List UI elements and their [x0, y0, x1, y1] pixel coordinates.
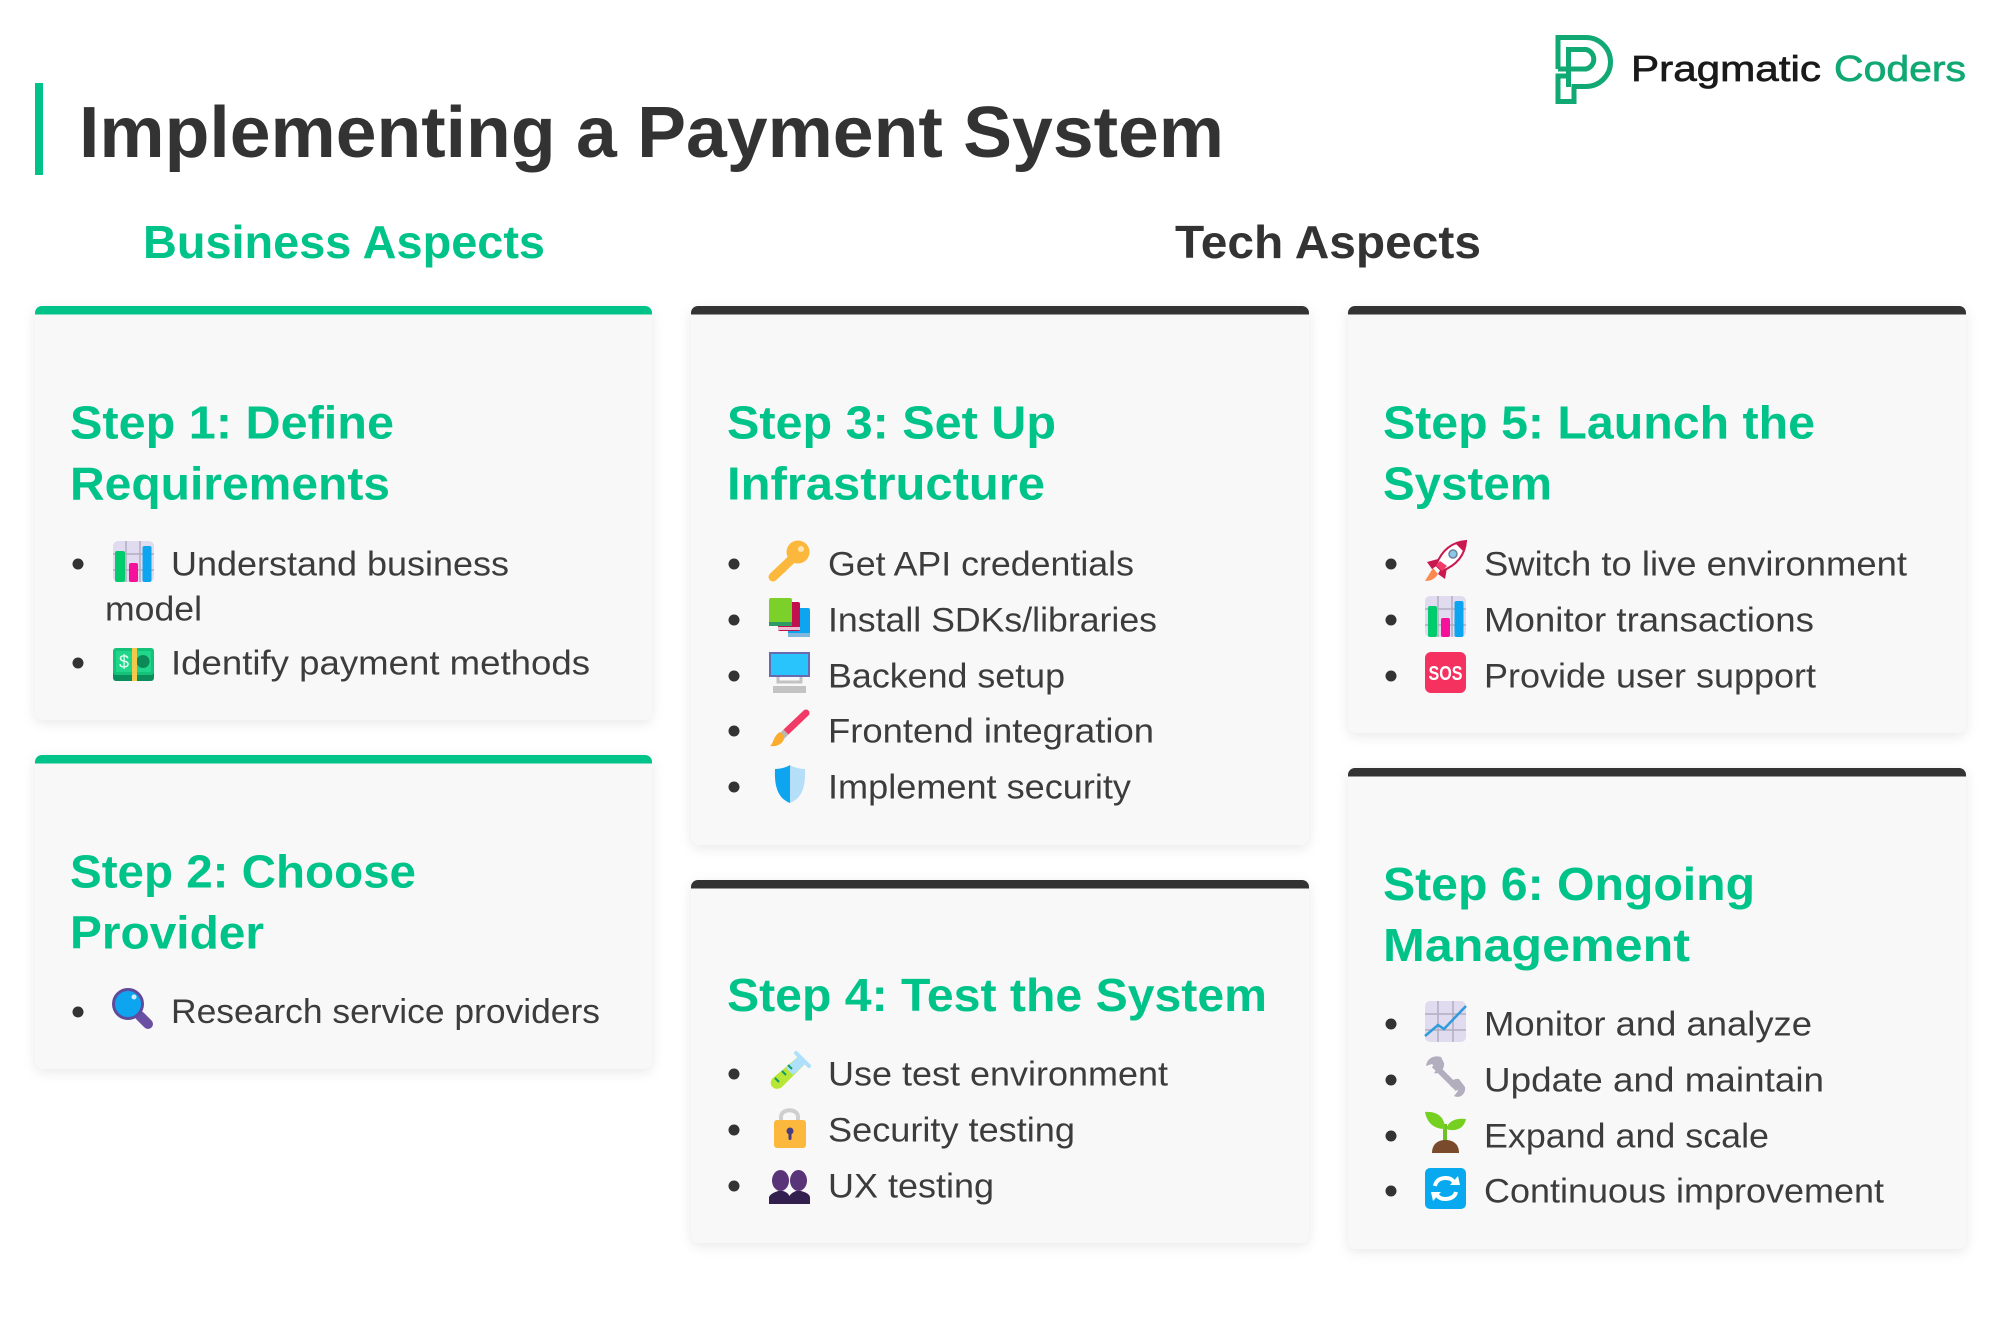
panel: step 3	[691, 306, 1309, 845]
step 6 heading: Management	[1383, 919, 1690, 971]
text: Identify payment methods	[171, 644, 590, 682]
logo wordmark accent: Coders	[1834, 48, 1966, 89]
heading: Tech Aspects: Tech Aspects	[1175, 216, 1481, 268]
item: implement security	[728, 765, 1131, 806]
icon: computer	[770, 653, 809, 693]
text: Monitor transactions	[1484, 602, 1814, 640]
item: install SDKs/libraries	[728, 598, 1157, 640]
text: Implement security	[828, 768, 1131, 806]
text: Continuous improvement	[1484, 1172, 1885, 1210]
text: Install SDKs/libraries	[828, 602, 1157, 640]
step 3 heading: Infrastructure	[727, 458, 1045, 510]
step 5 heading: Step 5: Launch the	[1383, 396, 1815, 448]
step 5 heading	[1383, 396, 1815, 510]
icon: wrench	[1426, 1056, 1465, 1097]
step 2 heading: Step 2: Choose	[70, 846, 416, 898]
text: Expand and scale	[1484, 1118, 1769, 1156]
item: provide user support	[1386, 652, 1817, 696]
step 6 heading	[1383, 858, 1755, 971]
text: Frontend integration	[828, 712, 1154, 750]
logo wordmark: Pragmatic	[1631, 48, 1821, 89]
text: Security testing	[828, 1112, 1075, 1150]
item: switch to live environment	[1386, 541, 1908, 584]
icon: bar chart	[1425, 596, 1466, 637]
title: Implementing a Payment System	[79, 93, 1224, 173]
icon: magnifier	[114, 990, 148, 1024]
icon: key	[773, 540, 810, 577]
item: identify payment methods	[72, 644, 590, 682]
panel: step 5	[1348, 306, 1966, 733]
icon: money	[113, 648, 154, 681]
text: UX testing	[828, 1168, 994, 1206]
step 1 heading: Step 1: Define	[70, 396, 394, 448]
item: update and maintain	[1386, 1056, 1824, 1100]
step 5 heading: System	[1383, 458, 1552, 510]
heading: Business Aspects: Business Aspects	[143, 216, 545, 268]
item: use test environment	[728, 1053, 1169, 1094]
step 6 heading: Step 6: Ongoing	[1383, 858, 1755, 910]
item: backend setup	[728, 653, 1065, 696]
text: Use test environment	[828, 1056, 1169, 1094]
item: monitor and analyze	[1386, 1001, 1812, 1044]
step 3 heading	[727, 396, 1056, 510]
icon: rocket	[1425, 541, 1466, 581]
panel: step 1	[35, 306, 652, 720]
item: frontend integration	[728, 712, 1154, 750]
text continuation: model	[105, 590, 202, 628]
panel: step 4	[691, 880, 1309, 1243]
icon: people	[769, 1170, 810, 1204]
text: Backend setup	[828, 658, 1065, 696]
step 1 heading: Requirements	[70, 458, 390, 510]
icon: books	[769, 598, 810, 637]
text: Update and maintain	[1484, 1062, 1824, 1100]
item: UX testing	[728, 1168, 994, 1206]
icon: paintbrush	[770, 713, 806, 746]
icon: shield	[775, 765, 805, 803]
icon: test tube	[771, 1053, 809, 1089]
icon: line chart	[1425, 1001, 1466, 1042]
logo: Pragmatic Coders	[1558, 38, 1966, 102]
panel: step 6	[1348, 768, 1966, 1249]
step 3 heading: Step 3: Set Up	[727, 396, 1056, 448]
step 1 heading	[70, 396, 394, 510]
step 2 heading: Provider	[70, 906, 264, 958]
icon: bar chart	[113, 541, 154, 582]
step 2 heading	[70, 846, 416, 958]
text: Get API credentials	[828, 546, 1134, 584]
icon: refresh	[1425, 1168, 1466, 1209]
item: expand and scale	[1386, 1112, 1769, 1156]
item: understand business model	[72, 541, 509, 628]
icon: padlock	[774, 1110, 806, 1148]
icon: seedling	[1425, 1112, 1466, 1153]
text: Research service providers	[171, 993, 600, 1031]
logo mark	[1558, 38, 1610, 102]
item: security testing	[728, 1110, 1075, 1150]
item: get API credentials	[728, 540, 1134, 584]
item: continuous improvement	[1386, 1168, 1885, 1210]
text: Understand business	[171, 546, 509, 584]
icon: SOS	[1425, 652, 1466, 693]
item: research service providers	[72, 990, 600, 1031]
text: Provide user support	[1484, 658, 1817, 696]
item: monitor transactions	[1386, 596, 1814, 640]
icon: SOS: SOS	[1428, 663, 1462, 685]
title accent bar	[35, 83, 43, 175]
text: Monitor and analyze	[1484, 1006, 1812, 1044]
text: Switch to live environment	[1484, 546, 1908, 584]
icon: money: $	[119, 652, 129, 672]
step 4 heading: Step 4: Test the System	[727, 969, 1267, 1021]
panel: step 2	[35, 755, 652, 1069]
